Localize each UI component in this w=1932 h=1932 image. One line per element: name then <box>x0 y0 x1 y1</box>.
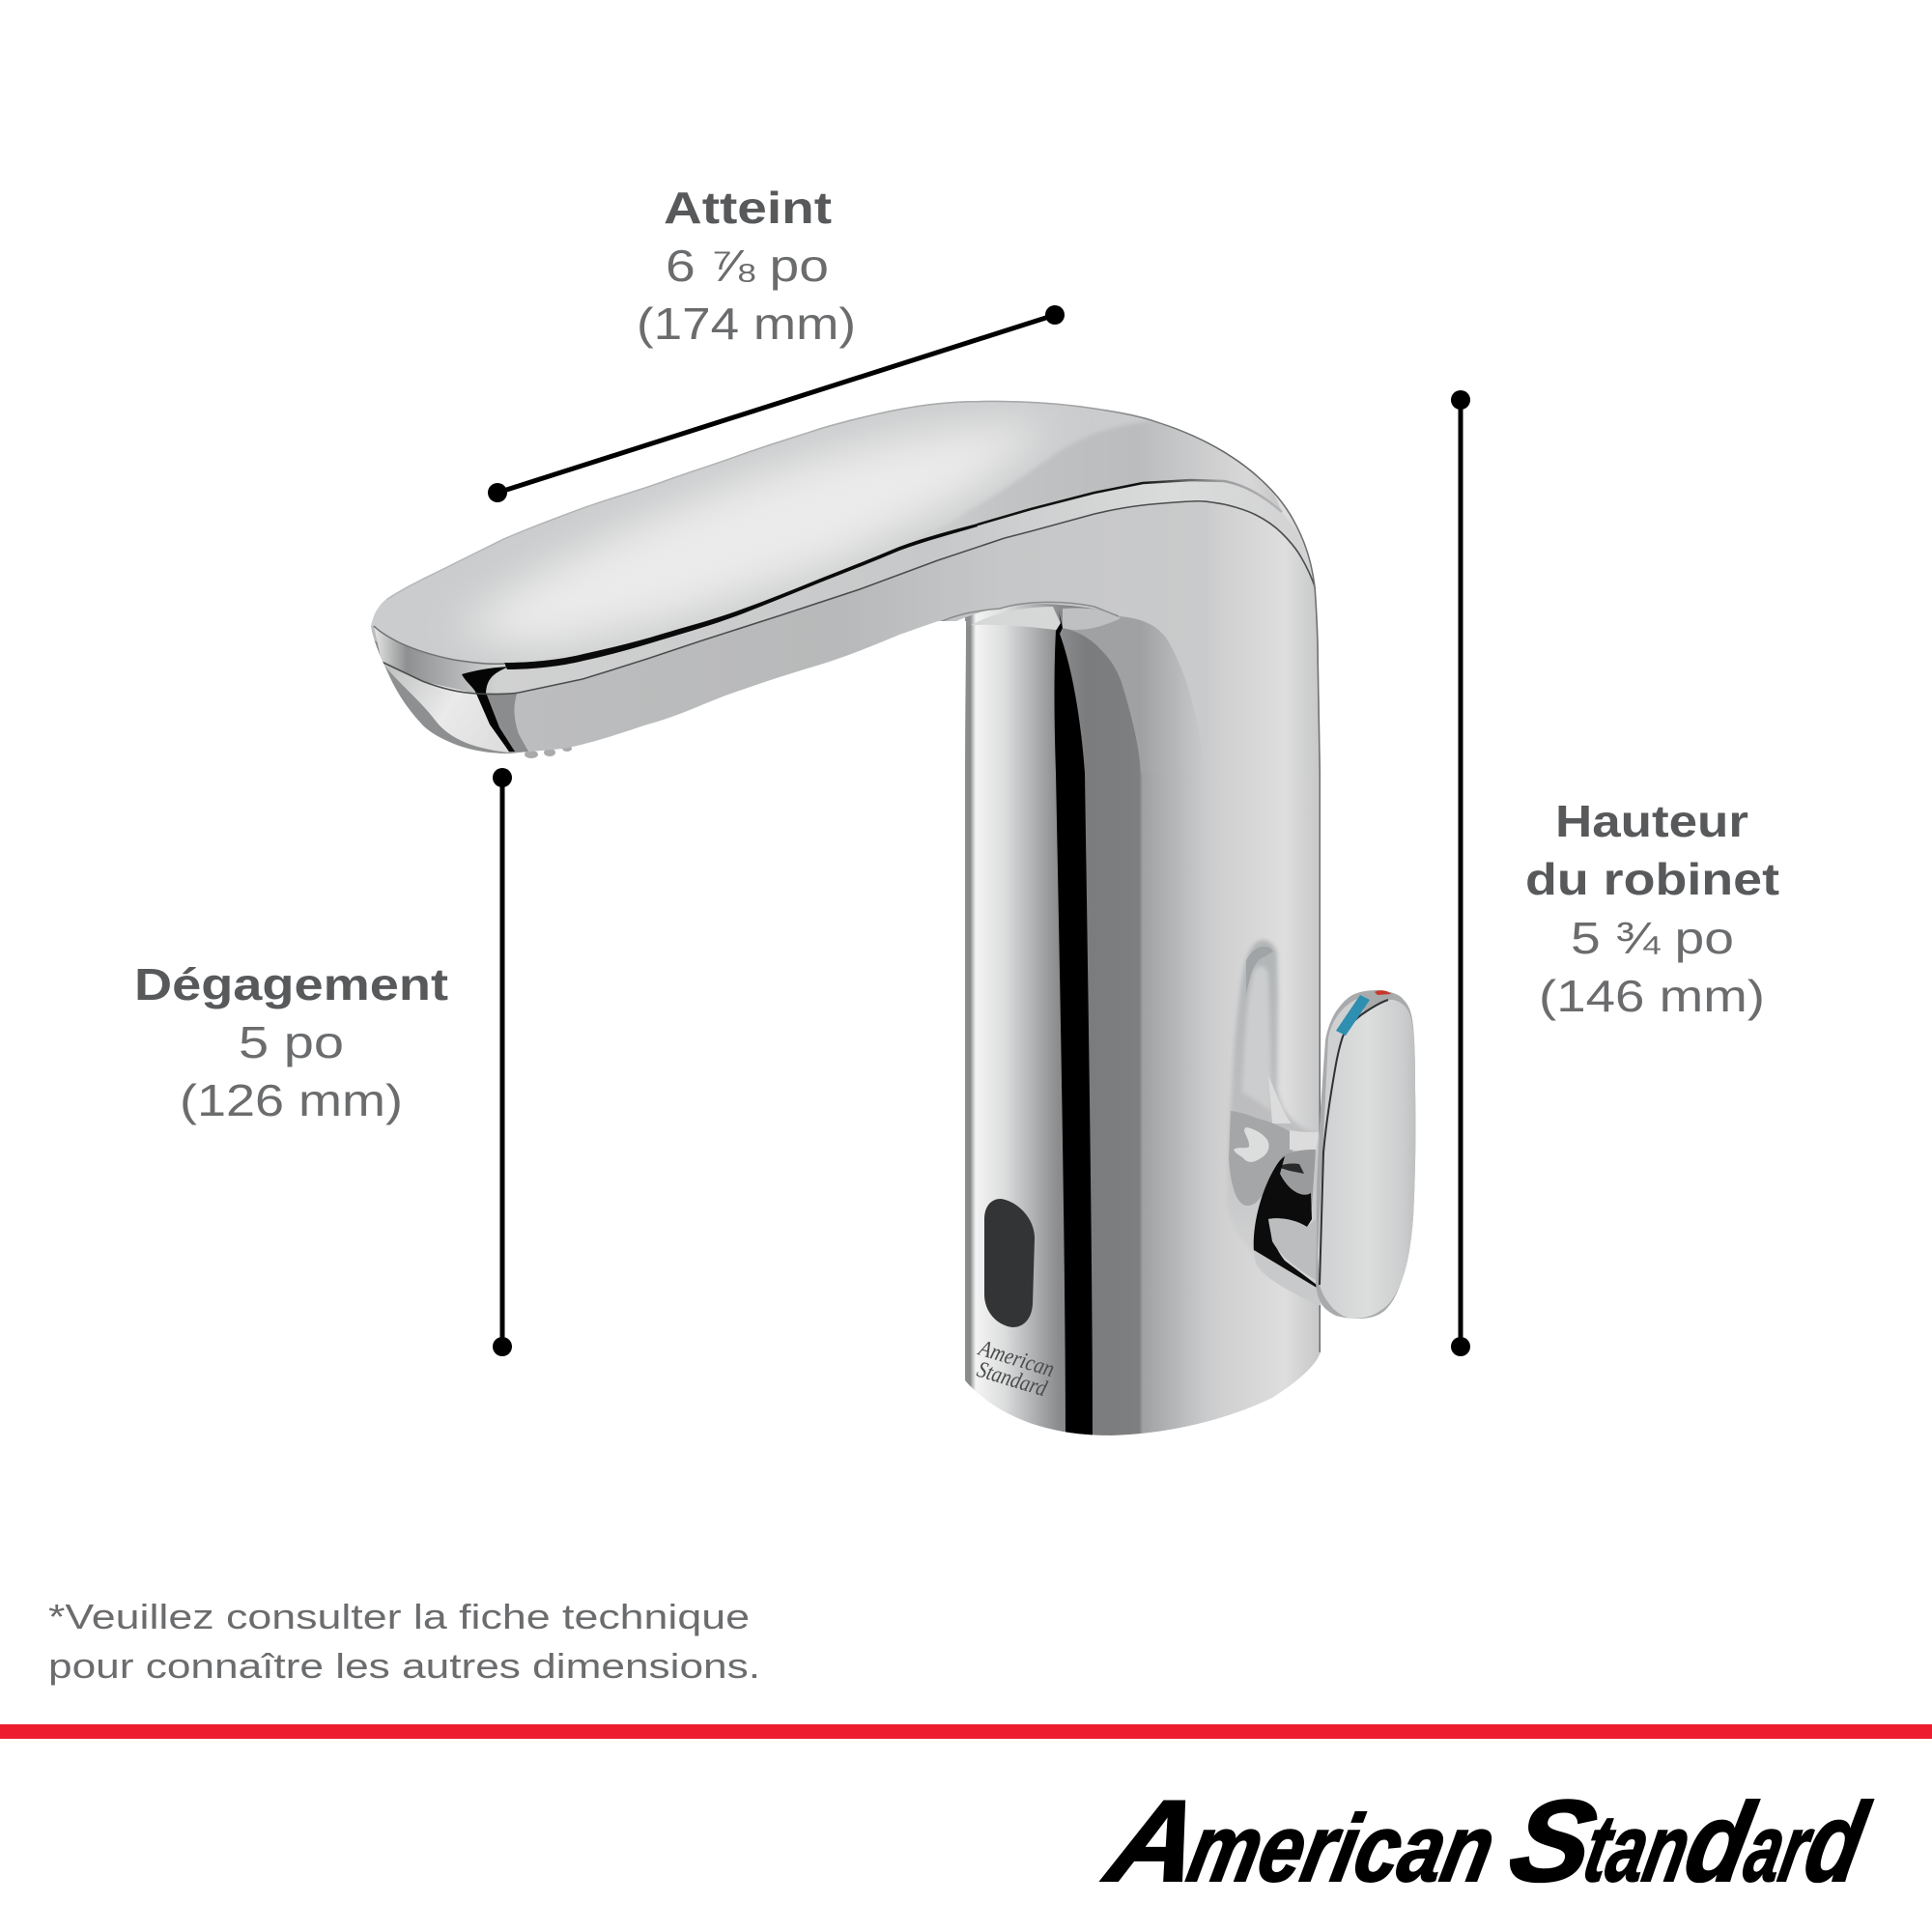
rim highlight <box>1318 999 1364 1280</box>
icon: sensor window <box>984 1199 1035 1327</box>
grey beside tip stripe <box>486 689 528 753</box>
heading: faucet height dimension: 5 ¾ po <box>1571 913 1734 963</box>
heading: reach dimension <box>637 183 856 349</box>
illustration: chrome faucet <box>357 386 1415 1439</box>
plate grey wedge <box>958 421 1257 523</box>
brand logo: S <box>1500 1776 1606 1906</box>
heading: faucet height dimension <box>1525 796 1779 1021</box>
cold indicator <box>1336 995 1370 1036</box>
brand logo <box>1094 1776 1878 1906</box>
heading: reach dimension: (174 mm) <box>637 298 856 349</box>
footnote: pour connaître les autres dimensions. <box>48 1646 760 1686</box>
heading: clearance dimension: Dégagement <box>134 959 448 1009</box>
brand logo: ar <box>1736 1796 1822 1902</box>
faucet body and spout <box>357 386 1352 1439</box>
collar under arch <box>971 607 1063 630</box>
brand logo: d <box>1796 1779 1878 1905</box>
black tip glint <box>462 667 515 752</box>
heading: reach dimension: 6 ⅞ po <box>666 241 829 291</box>
brand logo: d <box>1676 1779 1764 1905</box>
icon: handle lever <box>1316 990 1415 1319</box>
handle reflection on body <box>1227 940 1320 1294</box>
footnote: *Veuillez consulter la fiche technique <box>48 1597 750 1636</box>
small brand mark on faucet <box>974 1335 1057 1403</box>
small brand mark on faucet: Standard <box>974 1357 1050 1403</box>
brand logo: tan <box>1576 1796 1699 1902</box>
brand logo: A <box>1094 1776 1212 1906</box>
arrow: height measure line <box>1451 390 1470 1356</box>
footnote <box>48 1597 760 1686</box>
heading: faucet height dimension: Hauteur <box>1555 796 1748 846</box>
hot indicator <box>1375 990 1391 995</box>
chrome band between seams <box>374 480 1316 694</box>
knob face edge <box>1320 1000 1388 1285</box>
knob face <box>1320 1000 1415 1319</box>
lever neck chrome <box>1254 1150 1321 1306</box>
spout arm <box>371 400 1321 755</box>
column gradient <box>965 599 1322 1439</box>
column left edge <box>966 626 971 1399</box>
plate lower seam <box>382 501 1316 695</box>
black column reflection <box>1055 611 1093 1439</box>
small brand mark on faucet: American <box>975 1335 1057 1382</box>
spout tip lower <box>375 640 517 753</box>
arrow: reach measure line <box>488 305 1065 502</box>
heading: clearance dimension: (126 mm) <box>180 1075 403 1125</box>
arch light band <box>1068 616 1142 773</box>
red divider bar <box>0 1724 1932 1739</box>
silhouette edge <box>386 401 1321 1352</box>
heading: clearance dimension <box>134 959 448 1125</box>
heading: reach dimension: Atteint <box>664 183 832 233</box>
heading: faucet height dimension: du robinet <box>1525 854 1779 904</box>
heading: faucet height dimension: (146 mm) <box>1539 971 1765 1021</box>
top plate <box>371 402 1281 664</box>
brand logo: merican <box>1179 1796 1504 1902</box>
heading: clearance dimension: 5 po <box>239 1017 344 1067</box>
aerator bumps <box>525 746 572 758</box>
plate dark seam <box>504 524 978 669</box>
arrow: clearance measure line <box>493 768 512 1356</box>
